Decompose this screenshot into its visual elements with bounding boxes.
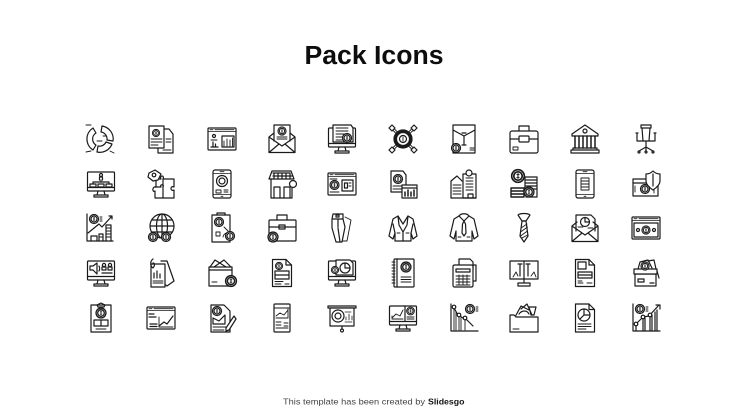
icon: office buildings [451,170,476,198]
icon: clipboard report [91,303,111,332]
icon: document with pie chart [576,304,594,332]
icon: smartphone with line chart [274,304,290,332]
icon: puzzle pieces with tag [148,170,174,198]
icon: suit jacket [389,216,417,241]
icon: browser with line chart [147,307,175,329]
icon: storefront [269,171,296,198]
icon: monitor with pie chart document [328,260,356,286]
icon: document with calendar chart [391,171,417,198]
icon: browser with coin and card [328,173,356,195]
icon: tagged papers [151,259,174,287]
icon: monitor with megaphone and people [88,261,114,286]
icon: briefcase with coin [268,215,296,242]
icon: presentation board with donut chart [328,306,356,332]
icon: wallet with cash and coin [209,260,236,286]
icon: globe with coins [148,214,174,242]
icon: smartphone with coin stack [576,170,594,198]
icon: financial documents [149,126,173,153]
icon: monitor with newspaper and coin [328,125,356,153]
icon: monitor with organisation chart [88,172,114,197]
icon: office chair [636,125,656,153]
icon: stacks of coins [511,170,537,197]
footer credit: This template has been created by [283,396,426,406]
icon: banknote with shield [633,171,660,196]
icon: invoice document [272,260,292,286]
icon: envelope with chart letter [572,215,598,242]
footer credit: Slidesgo [428,396,464,406]
icon: falling chart with coin [451,304,478,331]
icon: notebook with coin [392,259,414,287]
icon: shirt with tie [450,214,478,241]
icon: monitor with market pillars [510,261,538,286]
icon: bank building [571,125,599,153]
icon: receipt calculator [453,259,476,287]
icon: document with table and photo [576,260,594,286]
icon: briefcase [510,126,538,153]
icon: bar chart with rising trend and coins [87,214,113,241]
icon: trousers [332,214,351,242]
icon: growing bar chart with coin [633,304,660,331]
icon: browser with bar charts [208,128,236,150]
icon: monitor with chart and coin [390,306,416,331]
icon: browser with banknote [632,217,660,239]
icon: document with chart and pencil [211,305,236,332]
icon: smartphone with gauge [213,170,231,198]
title: Pack Icons [304,42,444,70]
icon: segmented pie chart [86,125,114,153]
icon: sealed envelope folder with coin [452,125,475,153]
icon: central coin with network nodes [389,125,417,153]
icon: clipboard with coin flow [212,213,234,242]
icon: box with coin and papers [634,260,659,286]
icon grid [86,125,660,332]
icon: envelope with invoice [269,125,295,152]
icon: necktie [518,214,530,242]
icon: folder with cash and coin [510,304,538,332]
